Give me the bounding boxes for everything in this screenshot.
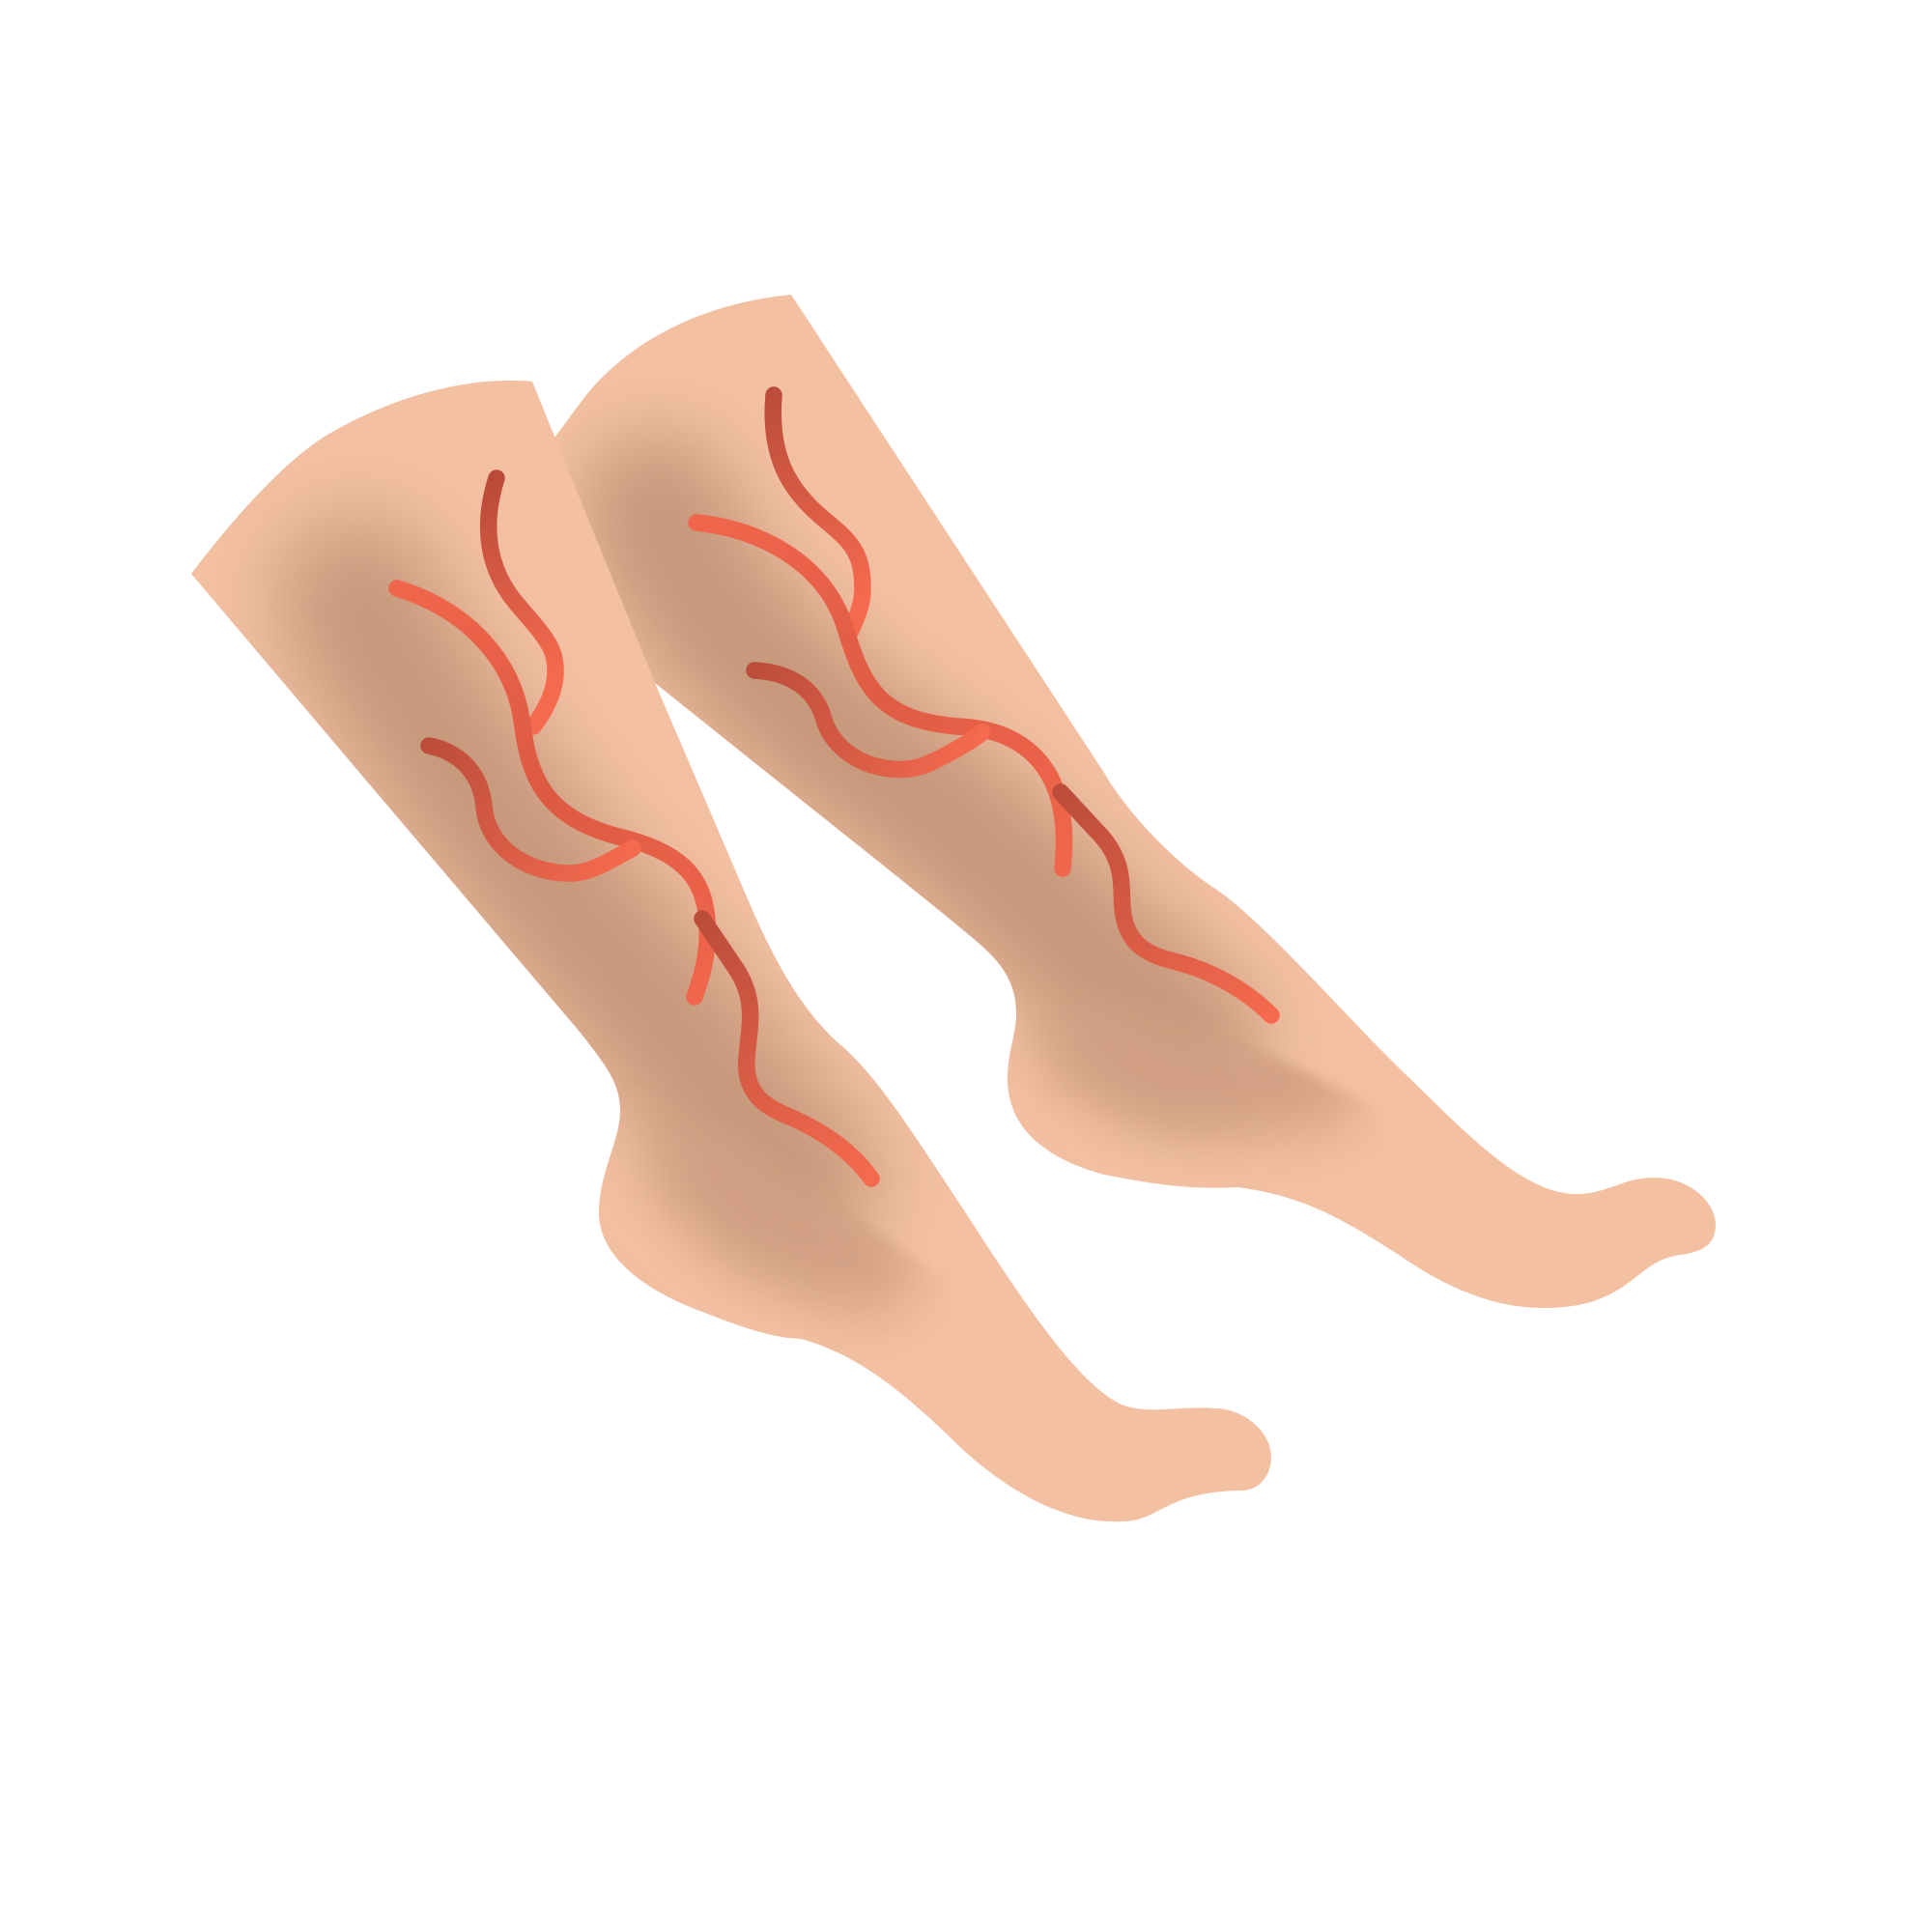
back leg shading: [657, 512, 1314, 1086]
back leg skin: [554, 295, 1716, 1308]
front leg: [191, 381, 1271, 1521]
illustration: two legs with varicose veins: [191, 295, 1716, 1522]
front leg veins: [397, 478, 871, 1179]
vein: lower branch: [702, 919, 871, 1179]
vein: upper branch: [773, 395, 863, 632]
back leg: [554, 295, 1716, 1308]
vein: middle branch: [754, 670, 982, 769]
front leg shading: [357, 599, 869, 1265]
vein: lower branch: [1061, 792, 1271, 1015]
back leg veins: [696, 395, 1271, 1015]
vein: middle branch: [429, 746, 633, 873]
vein: upper branch: [489, 478, 555, 726]
front leg skin: [191, 381, 1271, 1521]
vein: main trunk: [696, 523, 1065, 868]
vein: main trunk: [397, 588, 707, 997]
